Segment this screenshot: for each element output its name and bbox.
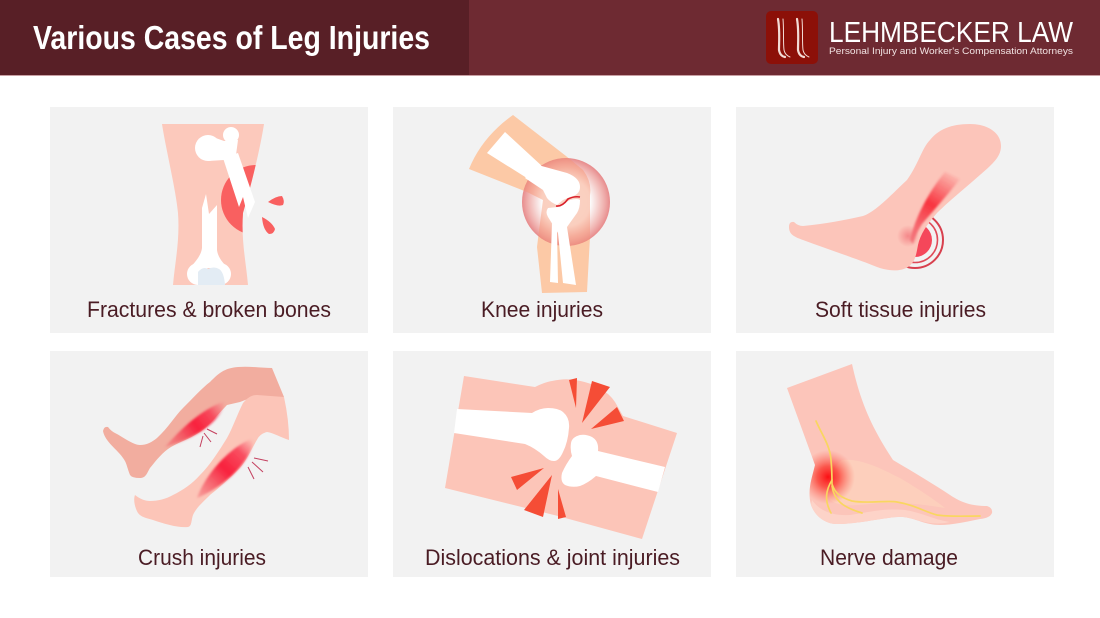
logo name: LEHMBECKER LAW <box>829 17 1074 49</box>
bruise: front leg <box>197 438 254 498</box>
panel: nerve damage <box>736 351 1054 577</box>
pain spikes <box>511 378 624 519</box>
panel: crush injuries <box>50 351 368 577</box>
icon: crushed legs <box>103 367 289 527</box>
pain rings <box>887 212 943 268</box>
impact marks <box>200 429 268 479</box>
caption: Fractures & broken bones <box>87 297 331 322</box>
tendon inflammation <box>910 172 960 244</box>
swelling circle <box>522 158 610 246</box>
title: Various Cases of Leg Injuries <box>33 19 430 56</box>
logo: Lehmbecker Law <box>766 11 1074 64</box>
icon: foot with heel pain <box>789 124 1001 270</box>
caption: Soft tissue injuries <box>815 297 986 322</box>
nerves <box>816 421 980 516</box>
logo tagline: Personal Injury and Worker's Compensation Attorneys <box>829 46 1073 57</box>
panel: dislocations and joint injuries <box>393 351 711 577</box>
caption: Crush injuries <box>138 545 266 570</box>
icon: broken leg bone <box>162 124 291 285</box>
icon: blood drops <box>262 196 284 234</box>
header bar <box>0 0 1100 76</box>
icon: logo mark <box>766 11 818 64</box>
icon: dislocated joint <box>445 376 677 539</box>
bruise: rear leg <box>165 401 225 447</box>
caption: Nerve damage <box>820 545 958 570</box>
icon: foot with nerves <box>787 364 992 525</box>
caption: Knee injuries <box>481 297 603 322</box>
panel: soft tissue injuries <box>736 107 1054 333</box>
panel: fractures and broken bones <box>50 107 368 333</box>
icon: knee joint <box>469 115 610 293</box>
caption: Dislocations & joint injuries <box>425 545 680 570</box>
nerve pain glow <box>810 452 854 502</box>
panel: knee injuries <box>393 107 711 333</box>
